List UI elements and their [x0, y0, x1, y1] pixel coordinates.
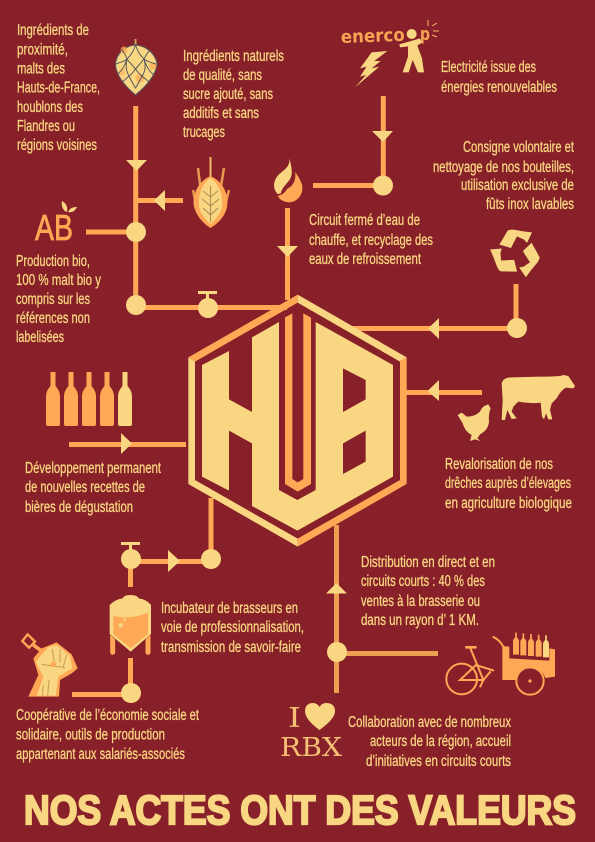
- text: organic production: labelisées: [16, 329, 64, 346]
- letter p: p: [420, 24, 430, 45]
- text: organic production: Production bio,: [16, 253, 90, 270]
- text: natural ingredients: Ingrédients naturels: [183, 48, 284, 65]
- icon: fist holding bottle opener: [22, 634, 78, 697]
- valve: top main line: [198, 291, 218, 318]
- icon: enercoop logo: [340, 20, 439, 72]
- icon: I love RBX: [280, 703, 343, 763]
- icon: recycling arrows: [488, 230, 545, 279]
- icon: hop cone: [115, 39, 157, 95]
- letters H and B: [202, 322, 393, 531]
- bicycle wheels: [446, 664, 544, 695]
- text: short distribution: [361, 554, 495, 629]
- text: local ingredients: Ingrédients de: [17, 22, 89, 39]
- icon: I love RBX: RBX: [280, 733, 343, 763]
- text: spent grain reuse: Revalorisation de nos: [445, 456, 553, 473]
- text: local ingredients: [17, 22, 100, 154]
- text: local ingredients: malts des: [17, 60, 65, 78]
- text: closed water circuit: eaux de refroissement: [309, 251, 422, 268]
- text: cooperative: Coopérative de l’économie sociale et: [16, 707, 199, 724]
- pipe: animals to logo: [406, 380, 482, 401]
- text: local ingredients: Hauts-de-France,: [17, 80, 100, 96]
- text: local ingredients: Flandres ou: [17, 118, 75, 135]
- text: new recipes: de nouvelles recettes de: [25, 479, 145, 496]
- text: natural ingredients: additifs et sans: [183, 105, 259, 122]
- text: cooperative: appartenant aux salariés-associés: [16, 746, 185, 763]
- text: local ingredients: houblons des: [17, 99, 83, 116]
- text: spent grain reuse: [445, 456, 572, 512]
- bottles in crate: [513, 633, 549, 657]
- text: local ingredients: régions voisines: [17, 137, 97, 154]
- cargo box: [502, 646, 555, 680]
- icon: fermentation tank: [110, 595, 151, 654]
- text: short distribution: Distribution en direct et en: [361, 554, 495, 571]
- text: new recipes: [25, 460, 161, 516]
- letter U: [285, 313, 311, 492]
- text: regional collaboration: Collaboration avec de nombreux: [348, 714, 511, 731]
- icon: cow: [502, 375, 575, 420]
- pipe: enercoop to flame: [313, 96, 393, 196]
- text: organic production: références non: [16, 310, 90, 327]
- central HUB logo: [188, 295, 407, 547]
- icon: AB organic label: AB: [35, 207, 73, 248]
- enercoop wordmark: enerco: [340, 25, 405, 48]
- icon: lightning bolt: [355, 51, 387, 87]
- icon: beer bottles: [46, 372, 132, 426]
- icon: cargo bicycle: [446, 633, 555, 695]
- pipe: cooperative to incubator: [72, 658, 141, 703]
- text: natural ingredients: de qualité, sans: [183, 67, 262, 84]
- text: brewer incubator: transmission de savoir-faire: [161, 639, 301, 656]
- text: short distribution: circuits courts : 40 % des: [361, 573, 485, 590]
- enercoop person: [399, 29, 424, 72]
- text: organic production: [16, 253, 101, 346]
- text: regional collaboration: [348, 714, 511, 770]
- text: brewer incubator: [161, 600, 304, 656]
- bicycle frame: [460, 637, 503, 687]
- text: local ingredients: proximité,: [17, 42, 68, 58]
- text: new recipes: Développement permanent: [25, 460, 161, 477]
- text: cooperative: [16, 707, 199, 763]
- icon: wheat ear: [193, 157, 229, 228]
- pipe: new recipes to logo: [69, 433, 186, 454]
- hexagon frame: [188, 295, 407, 547]
- pipe: distribution to logo: [326, 525, 438, 693]
- text: natural ingredients: sucre ajouté, sans: [183, 86, 273, 103]
- text: brewer incubator: Incubateur de brasseurs en: [161, 600, 298, 617]
- icon: hen: [458, 404, 491, 441]
- text: short distribution: ventes à la brasserie ou: [361, 593, 480, 610]
- icon: I love RBX: I: [288, 703, 301, 734]
- text: natural ingredients: [183, 48, 284, 141]
- text: natural ingredients: trucages: [183, 124, 225, 141]
- text: brewer incubator: voie de professionnalisation,: [161, 619, 304, 636]
- text: regional collaboration: d’initiatives en circuits courts: [366, 753, 511, 770]
- icon: flame: [274, 158, 302, 202]
- text: short distribution: dans un rayon d’ 1 KM.: [361, 612, 479, 629]
- text: renewable electricity: Electricité issue des: [441, 59, 536, 76]
- text: closed water circuit: [309, 212, 433, 268]
- text: organic production: 100 % malt bio y: [16, 272, 101, 289]
- text: renewable electricity: [441, 59, 557, 96]
- text: closed water circuit: chauffe, et recyclage des: [309, 232, 433, 249]
- pipe: recycling to logo: [353, 284, 527, 339]
- text: cooperative: solidaire, outils de production: [16, 726, 165, 744]
- pipe: incubator to logo: [121, 498, 221, 587]
- text: new recipes: bières de dégustation: [25, 499, 133, 516]
- text: organic production: compris sur les: [16, 291, 90, 308]
- pipe: hop and wheat to main line: [86, 106, 298, 315]
- text: regional collaboration: acteurs de la région, accueil: [370, 733, 511, 750]
- text: bottle deposit: [433, 139, 574, 213]
- text: closed water circuit: Circuit fermé d’eau de: [309, 212, 420, 229]
